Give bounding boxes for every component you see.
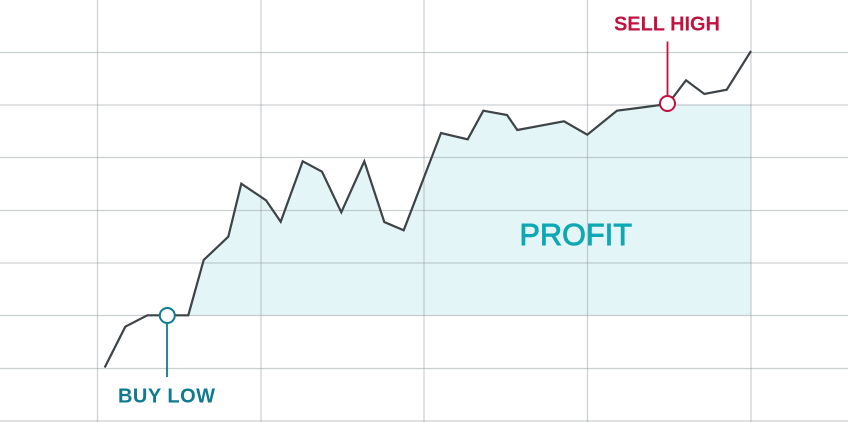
label: sell high: SELL HIGH	[614, 14, 720, 36]
label: profit: PROFIT	[520, 218, 632, 252]
label: buy low: BUY LOW	[118, 386, 215, 408]
sell high marker	[660, 42, 675, 111]
buy low marker	[160, 308, 175, 377]
profit shaded area	[188, 104, 751, 316]
price line	[105, 51, 751, 368]
